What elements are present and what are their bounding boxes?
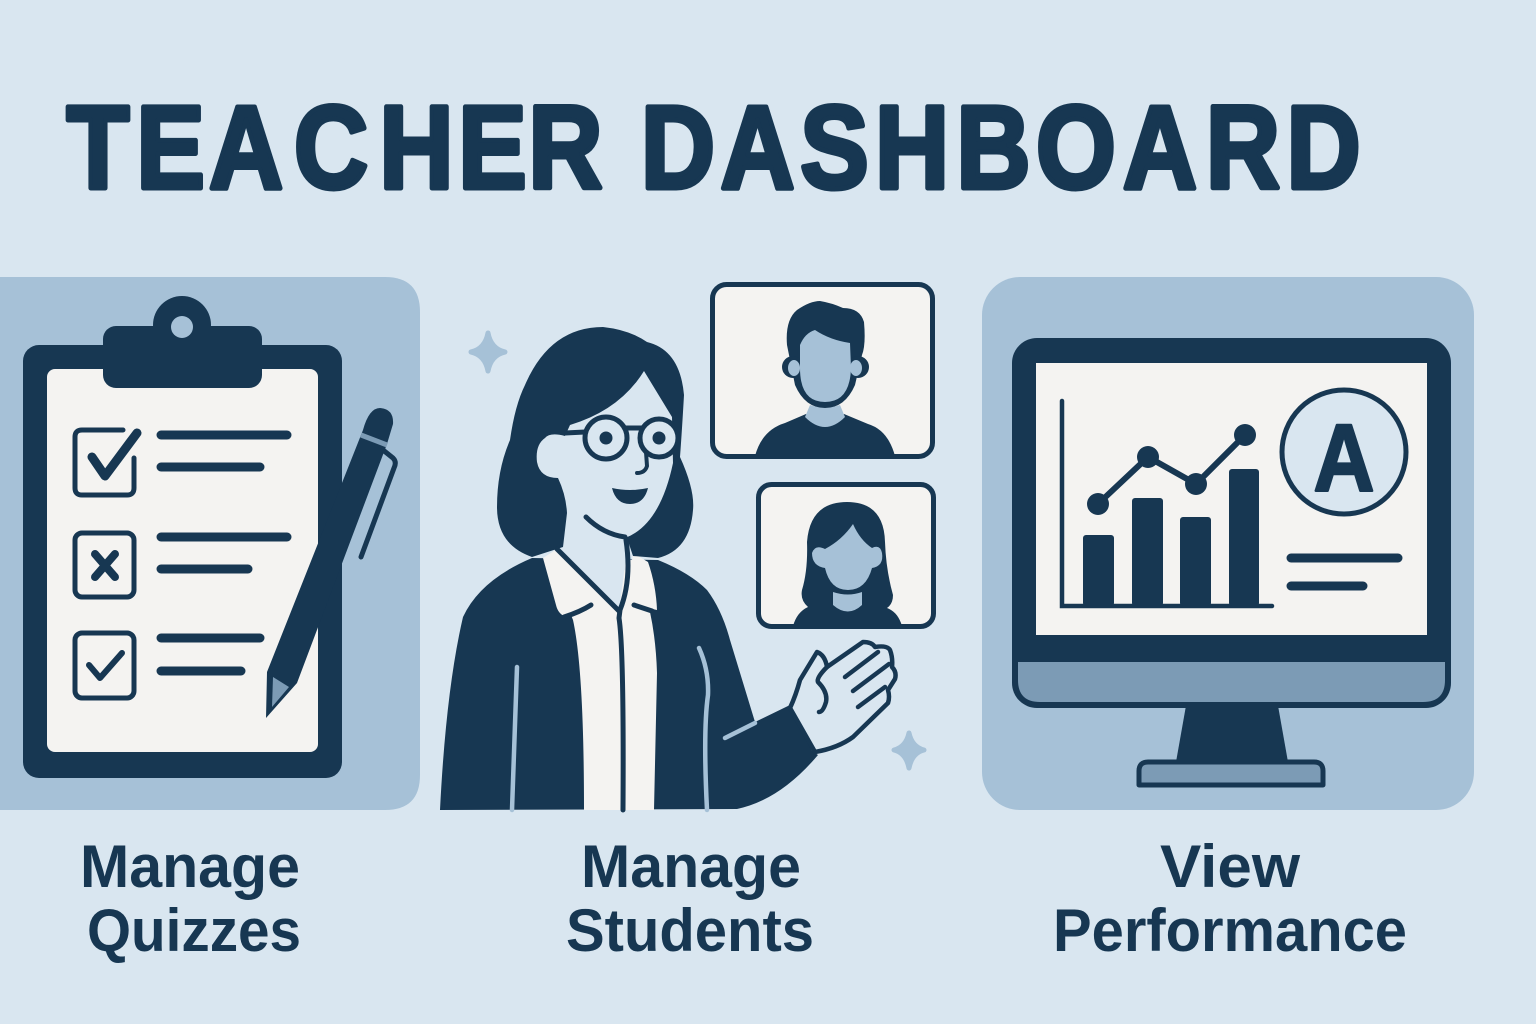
right collar — [628, 553, 657, 610]
label: manage quizzes — [80, 833, 301, 964]
video tile 1 — [712, 284, 932, 456]
lines 1 — [161, 435, 287, 467]
grade badge — [1282, 390, 1406, 514]
panel background — [0, 277, 420, 810]
panel: view performance — [982, 277, 1474, 810]
jacket seams — [512, 648, 755, 810]
sparkle top — [471, 333, 505, 371]
jacket — [440, 558, 818, 810]
label: manage students: Manage — [581, 833, 801, 900]
title: TEACHER DASHBOARD — [67, 82, 1361, 214]
video tile 2 — [758, 484, 934, 626]
icon: pen — [266, 408, 395, 718]
label: manage quizzes: Quizzes — [87, 897, 301, 964]
sparkle bottom — [894, 733, 924, 768]
lines 2 — [161, 537, 287, 569]
icon: clipboard — [23, 296, 342, 778]
icon: crossed box — [75, 533, 134, 597]
nose — [637, 452, 647, 473]
icon: checked box 1 — [75, 430, 137, 495]
neck — [557, 535, 629, 611]
label: view performance: View — [1160, 833, 1300, 900]
label: view performance — [1053, 833, 1407, 964]
teacher figure — [440, 327, 896, 810]
face — [537, 371, 673, 580]
bar chart — [1062, 401, 1272, 606]
panel: manage quizzes — [0, 277, 420, 810]
label: manage students: Students — [566, 897, 814, 964]
label: view performance: Performance — [1053, 897, 1407, 964]
icon: monitor — [1012, 338, 1451, 708]
hair — [497, 327, 693, 558]
collar and placket lines — [557, 540, 652, 810]
grade badge: A — [1313, 405, 1375, 512]
glasses — [565, 417, 678, 459]
mouth — [612, 488, 648, 504]
panel: manage students — [80, 277, 1474, 964]
shirt — [565, 560, 657, 810]
panel background — [982, 277, 1474, 810]
label: manage students — [566, 833, 814, 964]
icon: checked box 3 — [75, 633, 134, 698]
chin line — [586, 517, 625, 537]
hand — [790, 642, 896, 752]
lines 3 — [161, 638, 260, 671]
left collar — [543, 549, 619, 617]
icon: monitor stand — [1139, 700, 1323, 785]
label: manage quizzes: Manage — [80, 833, 300, 900]
text lines — [1291, 558, 1398, 586]
